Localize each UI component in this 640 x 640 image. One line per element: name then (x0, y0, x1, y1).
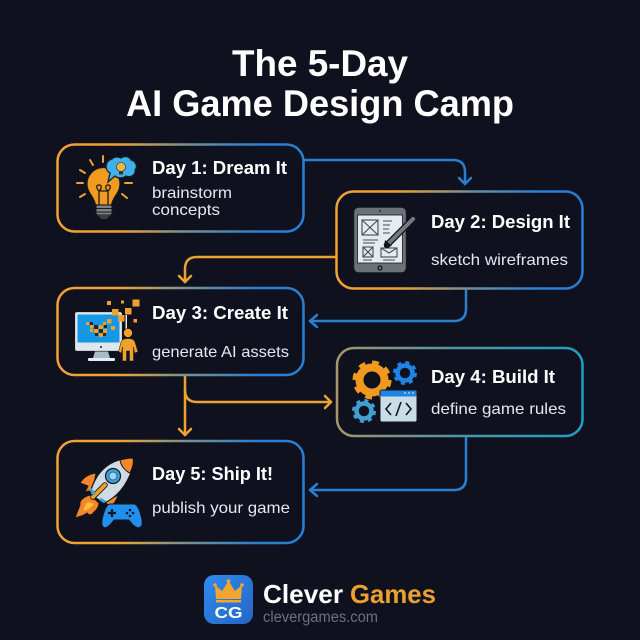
day 1 description (152, 185, 232, 219)
panel border (336, 192, 582, 288)
arrow: day 2 to day 3 (179, 257, 336, 282)
day 4 heading: Day 4: Build It (431, 367, 555, 387)
icon: gears and code window (354, 362, 417, 422)
website: clevergames.com (263, 609, 378, 626)
arrow: day 1 to day 2 (304, 160, 471, 184)
panel: day 3 (58, 288, 304, 375)
arrow: day 4 to day 5 (310, 436, 466, 496)
icon: crown (213, 579, 244, 602)
logo initials: CG (214, 605, 242, 622)
icon: monitor with pixels and person (74, 300, 140, 361)
brand name: Clever (263, 579, 343, 609)
day 5 heading: Day 5: Ship It! (152, 464, 273, 484)
day 1 description: brainstorm (152, 185, 232, 202)
day 5 description: publish your game (152, 500, 290, 517)
arrow: day 3 to day 5 (179, 375, 191, 435)
day 2 heading: Day 2: Design It (431, 212, 570, 232)
title: AI Game Design Camp (126, 83, 514, 124)
day 4 description: define game rules (431, 401, 566, 418)
title (126, 43, 514, 124)
day 2 description: sketch wireframes (431, 252, 568, 269)
day 1 description: concepts (152, 202, 220, 219)
icon: light bulb (77, 156, 136, 219)
panel: day 1 (58, 144, 304, 232)
logo: Clever Games (204, 575, 436, 626)
brand name: Games (350, 579, 436, 609)
panel: day 4 (337, 348, 582, 436)
panel: day 2 (336, 192, 582, 288)
day 1 heading: Day 1: Dream It (152, 158, 287, 178)
panel border (58, 441, 304, 543)
title: The 5-Day (232, 43, 408, 84)
logo badge (204, 575, 253, 624)
panel border (58, 288, 304, 375)
icon: tablet wireframe (354, 207, 413, 273)
brand name (263, 579, 436, 609)
arrow: day 2 back to day 3 (310, 288, 466, 327)
panel: day 5 (58, 441, 304, 543)
day 3 heading: Day 3: Create It (152, 303, 288, 323)
day 3 description: generate AI assets (152, 344, 289, 361)
panel border (337, 348, 582, 436)
arrow: day 3 to day 4 (185, 390, 331, 408)
icon: rocket and controller (75, 458, 142, 528)
panel border (58, 144, 304, 232)
